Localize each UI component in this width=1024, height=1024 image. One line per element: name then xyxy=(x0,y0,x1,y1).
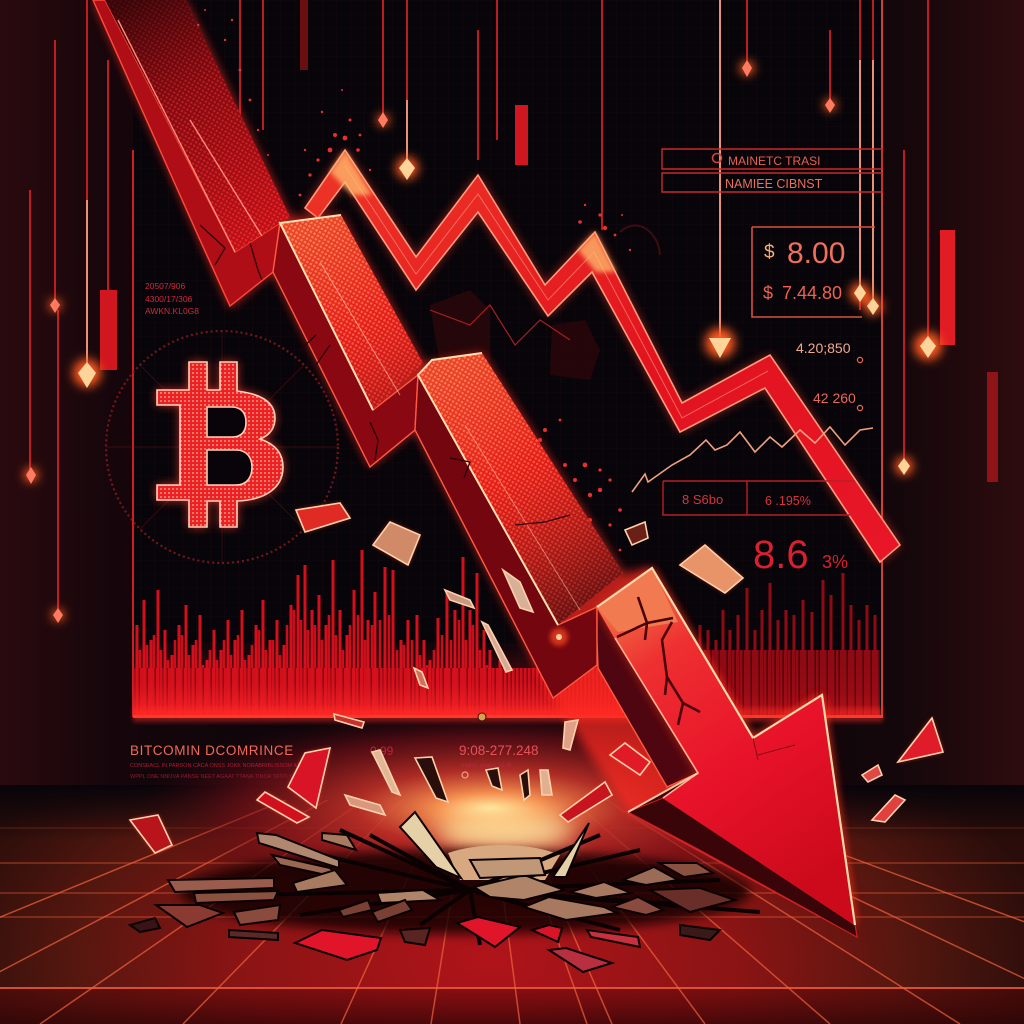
spark xyxy=(550,628,568,646)
first band top xyxy=(105,0,290,252)
falling light streaks xyxy=(30,0,998,615)
bitcoin symbol xyxy=(157,362,283,527)
faint ghost chart shapes xyxy=(430,226,660,380)
stat boxes xyxy=(663,481,855,515)
price box xyxy=(752,227,875,317)
price box: $ xyxy=(763,283,773,303)
bar chart xyxy=(133,550,883,722)
lower shaft side xyxy=(597,607,698,787)
market crash header boxes: NAMIEE CIBNST xyxy=(725,177,823,191)
impact blast xyxy=(140,708,840,908)
right data readouts: 4.20;850 xyxy=(796,340,851,356)
cracks xyxy=(200,225,570,525)
bottom left title text: CONSEACL IN PARSON CACA ONSS JOKK NORABRIBLISSOM AT ERI xyxy=(130,763,311,769)
circle behind bitcoin xyxy=(106,331,338,563)
third band side xyxy=(415,375,597,698)
bottom mid figures: 9:08-277.248 xyxy=(459,743,539,758)
stat boxes: 6 .195% xyxy=(765,494,811,508)
second zigzag arrow line xyxy=(305,150,900,562)
bottom left title text xyxy=(130,743,311,780)
shard fragments xyxy=(130,812,735,972)
bottom mid figures: trados yoanis s1 ilk xyxy=(461,763,513,769)
flying shards xyxy=(130,503,943,853)
main arrow head xyxy=(597,568,857,937)
first band side xyxy=(93,0,280,306)
light drop markers xyxy=(24,60,942,623)
floor xyxy=(0,785,1024,1024)
large percentage xyxy=(753,533,848,577)
large percentage: 8.6 xyxy=(753,533,809,577)
main falling arrow shaft xyxy=(93,0,855,925)
left small data text: AWKN.KL0G8 xyxy=(145,306,199,316)
left small data text: 20507/906 xyxy=(145,281,185,291)
market crash header boxes xyxy=(662,149,882,192)
bottom mid figures: 0:99 xyxy=(370,744,394,758)
second band side xyxy=(273,223,418,467)
dashboard panel xyxy=(132,0,883,717)
floor debris pile xyxy=(130,812,760,972)
left small data text: 4300/17/306 xyxy=(145,294,193,304)
price box: 7.44.80 xyxy=(782,283,842,303)
bottom left title text: BITCOMIN DCOMRINCE xyxy=(130,743,294,758)
mini line chart xyxy=(430,305,873,492)
bottom mid figures xyxy=(370,743,539,778)
price box: $ xyxy=(764,242,775,263)
splatter xyxy=(197,9,631,551)
stat boxes: 8 S6bo xyxy=(682,492,723,507)
price box: 8.00 xyxy=(787,237,845,270)
left small data text xyxy=(145,281,199,316)
large percentage: 3% xyxy=(822,552,848,572)
bottom left title text: WPPL ONE NNOVA PANSE NEET AGAAT TTANA TINOA TATPLY xyxy=(130,774,292,780)
black fracture lines xyxy=(250,830,760,945)
third band top xyxy=(418,353,623,625)
right data readouts: 42 260 xyxy=(813,390,856,406)
market crash header boxes: MAINETC TRASI xyxy=(728,154,820,168)
second band top xyxy=(280,215,423,410)
right data readouts xyxy=(796,340,863,411)
